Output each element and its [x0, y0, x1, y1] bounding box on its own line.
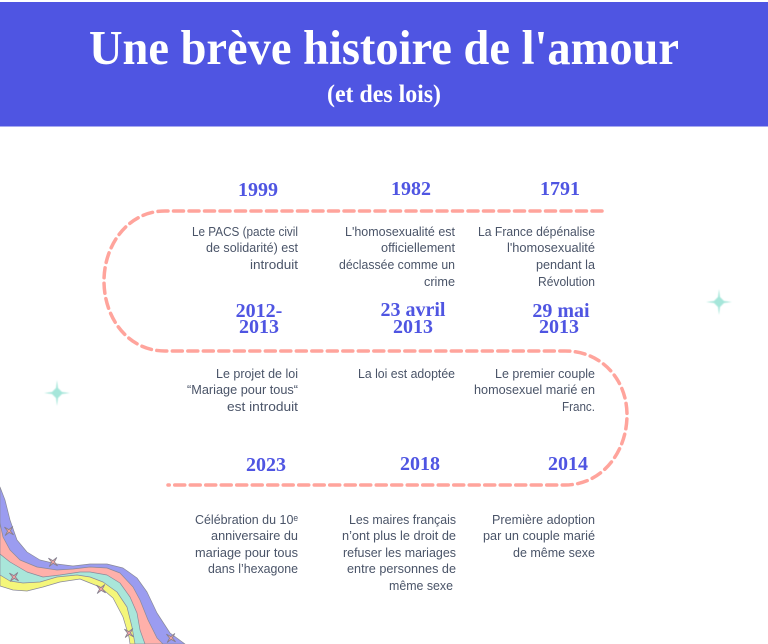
title: Une brève histoire de l'amour	[89, 20, 679, 75]
entry 1791: La France dépénalise	[478, 225, 595, 239]
entry 1791: 1791	[540, 178, 580, 200]
entry 1982: crime	[424, 275, 455, 289]
entry 2018: 2018	[400, 453, 440, 475]
entry 23 avril 2013: 23 avril	[380, 299, 446, 321]
entry 2012-2013: 2013	[239, 316, 279, 338]
entry 29 mai 2013: homosexuel marié en	[474, 383, 595, 397]
entry 23 avril 2013: La loi est adoptée	[358, 367, 455, 381]
entry 2023: mariage pour tous	[195, 546, 298, 560]
entry 1982: officiellement	[381, 241, 456, 255]
entry 2014: Première adoption	[492, 513, 595, 527]
entry 1999: Le PACS (pacte civil	[192, 225, 298, 239]
entry 1982: déclassée comme un	[339, 258, 455, 272]
entry 1999: de solidarité) est	[206, 241, 299, 255]
entry 2023	[195, 454, 298, 576]
entry 1982: 1982	[391, 178, 431, 200]
entry 1999: introduit	[250, 258, 299, 272]
dashed timeline path	[104, 211, 627, 485]
entry 2012-2013	[187, 300, 299, 414]
entry 29 mai 2013: 2013	[539, 316, 579, 338]
entry 1982: L'homosexualité est	[345, 225, 456, 239]
icon: teal sparkle right	[706, 289, 732, 315]
entry 2012-2013: 2012-	[236, 300, 282, 322]
entry 2018: même sexe	[389, 579, 453, 593]
entry 1999: 1999	[238, 179, 278, 201]
entry 2018	[342, 453, 456, 593]
entry 2012-2013: “Mariage pour tous“	[187, 383, 298, 397]
entry 2023: Célébration du 10ᵉ	[195, 513, 298, 527]
decorative ribbon stars	[1, 523, 179, 644]
entry 2023: dans l’hexagone	[208, 562, 298, 576]
icon: teal sparkle left	[44, 380, 70, 406]
entry 2014: 2014	[548, 453, 588, 475]
entry 2012-2013: Le projet de loi	[216, 367, 298, 381]
entry 2012-2013: est introduit	[227, 400, 299, 414]
entry 1791: pendant la	[536, 258, 595, 272]
decorative rainbow ribbon	[0, 487, 185, 644]
entry 1791: l'homosexualité	[507, 241, 595, 255]
entry 29 mai 2013: Le premier couple	[495, 367, 595, 381]
entry 2023: anniversaire du	[211, 529, 298, 543]
entry 29 mai 2013	[474, 300, 595, 414]
entry 1791: Révolution	[538, 275, 595, 289]
entry 1982	[339, 178, 456, 289]
entry 1791	[478, 178, 595, 289]
entry 2023: 2023	[246, 454, 286, 476]
entry 29 mai 2013: 29 mai	[532, 300, 590, 322]
entry 1999	[192, 179, 299, 272]
entry 29 mai 2013: Franc.	[562, 400, 595, 414]
entry 2014: de même sexe	[513, 546, 595, 560]
entry 2018: Les maires français	[349, 513, 456, 527]
subtitle: (et des lois)	[327, 81, 441, 108]
entry 2018: refuser les mariages	[343, 546, 456, 560]
header band	[0, 2, 768, 126]
entry 2018: n’ont plus le droit de	[342, 529, 456, 543]
entry 2018: entre personnes de	[347, 562, 456, 576]
entry 2014: par un couple marié	[483, 529, 595, 543]
entry 23 avril 2013	[358, 299, 455, 381]
entry 23 avril 2013: 2013	[393, 316, 433, 338]
entry 2014	[483, 453, 595, 560]
